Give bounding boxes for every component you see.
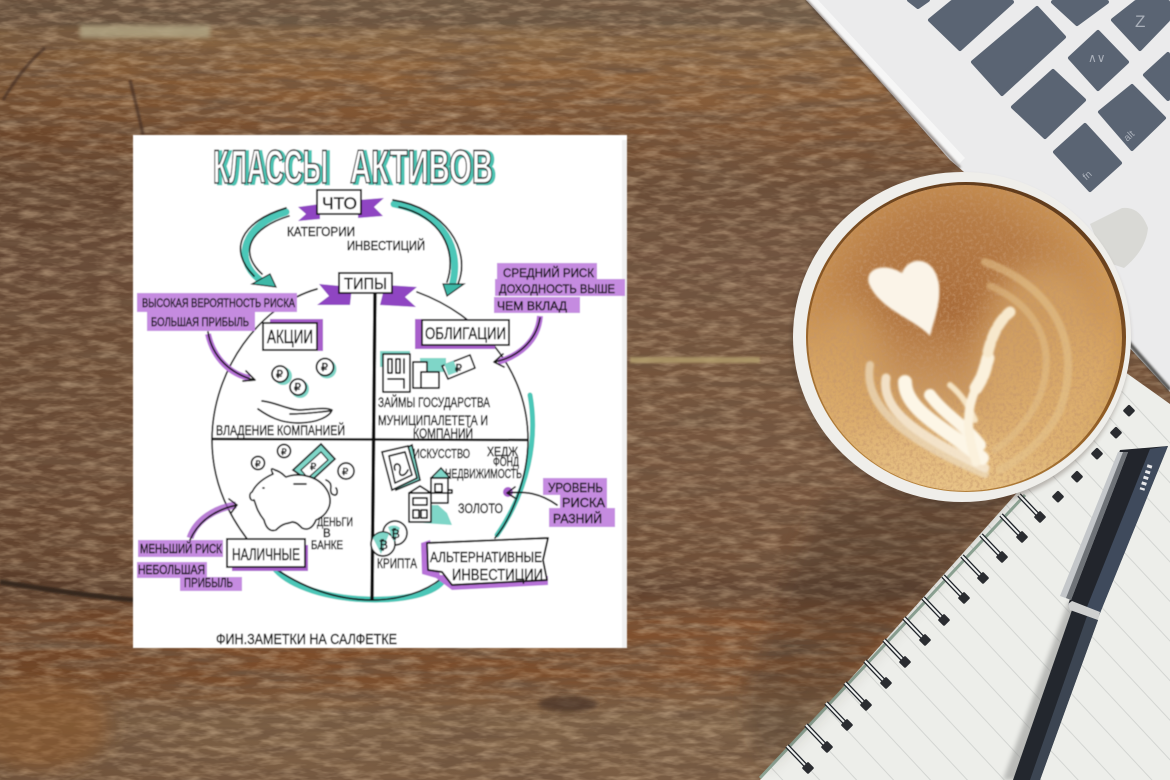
title: КЛАССЫ [213, 140, 328, 193]
text: владение компанией: ВЛАДЕНИЕ КОМПАНИЕЙ [216, 421, 345, 438]
heading: наличные [227, 539, 308, 571]
arrow: облигации callout [494, 316, 540, 367]
callout: наличные risk [137, 540, 242, 591]
callout: акции risk: ВЫСОКАЯ ВЕРОЯТНОСТЬ РИСКА [142, 296, 295, 310]
text: деньги в банке: БАНКЕ [311, 540, 343, 552]
text: займы: КОМПАНИЙ [413, 424, 473, 441]
text: alternative assets: ЗОЛОТО [458, 500, 503, 516]
callout: акции risk: БОЛЬШАЯ ПРИБЫЛЬ [151, 315, 249, 329]
infographic card [133, 135, 627, 648]
callout: альтернативные risk: УРОВЕНЬ [548, 480, 603, 495]
heading: альтернативные инвестиции: ИНВЕСТИЦИИ [452, 567, 543, 584]
ribbon: типы [317, 273, 417, 307]
cup handle [1090, 208, 1148, 268]
text: alternative assets: ФОНД [493, 455, 519, 469]
callout: альтернативные risk [543, 478, 615, 527]
callout: наличные risk: ПРИБЫЛЬ [184, 575, 233, 590]
ribbon: что [298, 190, 384, 221]
callout: облигации risk: ЧЕМ ВКЛАД [497, 299, 567, 313]
icon: crypto coins: ₿ [391, 527, 400, 541]
pen [1003, 446, 1168, 780]
footer credit: ФИН.ЗАМЕТКИ НА САЛФЕТКЕ [216, 632, 397, 648]
paper background [133, 135, 627, 648]
icon: government buildings and bonds: ₽ [455, 363, 462, 375]
callout: наличные risk: НЕБОЛЬШАЯ [138, 562, 205, 577]
icon: crypto coins [371, 521, 407, 556]
latte art heart [868, 261, 939, 336]
text: alternative assets: НЕДВИЖИМОСТЬ [445, 467, 522, 481]
callout: облигации risk: ДОХОДНОСТЬ ВЫШЕ [499, 282, 615, 296]
definition text [287, 224, 425, 253]
icon: ruble coins [272, 358, 336, 398]
text: займы: ЗАЙМЫ ГОСУДАРСТВА [378, 393, 490, 410]
heading: альтернативные инвестиции: АЛЬТЕРНАТИВНЫЕ [430, 549, 542, 566]
pie circle [212, 289, 533, 600]
heading: альтернативные инвестиции [421, 538, 548, 590]
icon: piggy bank with coins and banknote: ₽ [342, 467, 349, 478]
icon: piggy bank with coins and banknote: ₽ [255, 459, 261, 469]
text: alternative assets: КРИПТА [377, 555, 417, 571]
key legends: Z [1135, 12, 1145, 31]
callout: наличные risk: МЕНЬШИЙ РИСК [140, 541, 222, 556]
key legends [1081, 12, 1145, 183]
key legends: ∧∨ [1088, 51, 1106, 65]
icon: ruble coins: ₽ [321, 362, 328, 374]
arrow: альтернативные callout [503, 487, 557, 505]
heading: акции [263, 319, 323, 351]
icon: ruble coins: ₽ [276, 369, 283, 381]
key legends: fn [1081, 169, 1094, 183]
ribbon: что: ЧТО [322, 194, 357, 213]
callout: облигации risk: СРЕДНИЙ РИСК [503, 265, 594, 280]
icon: ruble coins: ₽ [294, 382, 301, 394]
text: займы: МУНИЦИПАЛЕТЕТА И [378, 412, 488, 428]
text: alternative assets: ИСКУССТВО [413, 447, 470, 461]
callout: акции risk [137, 293, 297, 331]
text: alternative assets: ХЕДЖ [487, 445, 518, 459]
icon: piggy bank with coins and banknote [250, 444, 354, 531]
icon: piggy bank with coins and banknote: ₽ [281, 447, 287, 457]
icon: painting [382, 445, 420, 490]
heading: облигации [415, 319, 509, 349]
title: АКТИВОВ [353, 141, 496, 194]
text: деньги в банке: ДЕНЬГИ [317, 517, 353, 529]
title: КЛАССЫ [216, 141, 331, 194]
ribbon: типы: ТИПЫ [344, 276, 387, 293]
icon: government buildings and bonds [380, 351, 475, 392]
coffee surface [805, 185, 1125, 495]
notebook with spiral binding [740, 372, 1170, 780]
laptop [806, 0, 1170, 392]
arrow: акции callout [208, 332, 255, 381]
definition text: КАТЕГОРИИ [287, 224, 355, 239]
text: alternative assets [377, 445, 522, 571]
icon: real estate [408, 468, 452, 525]
text: деньги в банке [311, 517, 353, 552]
heading: облигации: ОБЛИГАЦИИ [425, 324, 506, 343]
text: займы [378, 393, 490, 441]
icon: crypto coins: ₿ [379, 538, 388, 552]
icon: hand [258, 401, 332, 423]
callout: облигации risk [494, 263, 625, 313]
callout: альтернативные risk: РИСКА [562, 495, 605, 510]
latte art rosetta [869, 262, 1068, 474]
coffee cup [790, 172, 1148, 507]
key legends: alt [1122, 129, 1137, 144]
text: деньги в банке: В [323, 528, 331, 540]
definition text: ИНВЕСТИЦИЙ [347, 238, 425, 253]
callout: альтернативные risk: РАЗНИЙ [553, 511, 602, 526]
icon: piggy bank with coins and banknote: ₽ [310, 462, 317, 473]
arrow: наличные callout [190, 499, 237, 540]
arrow: что to right quadrant [393, 200, 464, 296]
keyboard keys [909, 0, 1168, 190]
heading: акции: АКЦИИ [267, 327, 313, 347]
arrow: что to left quadrant [240, 208, 289, 287]
heading: наличные: НАЛИЧНЫЕ [232, 545, 300, 564]
title: АКТИВОВ [350, 140, 493, 193]
